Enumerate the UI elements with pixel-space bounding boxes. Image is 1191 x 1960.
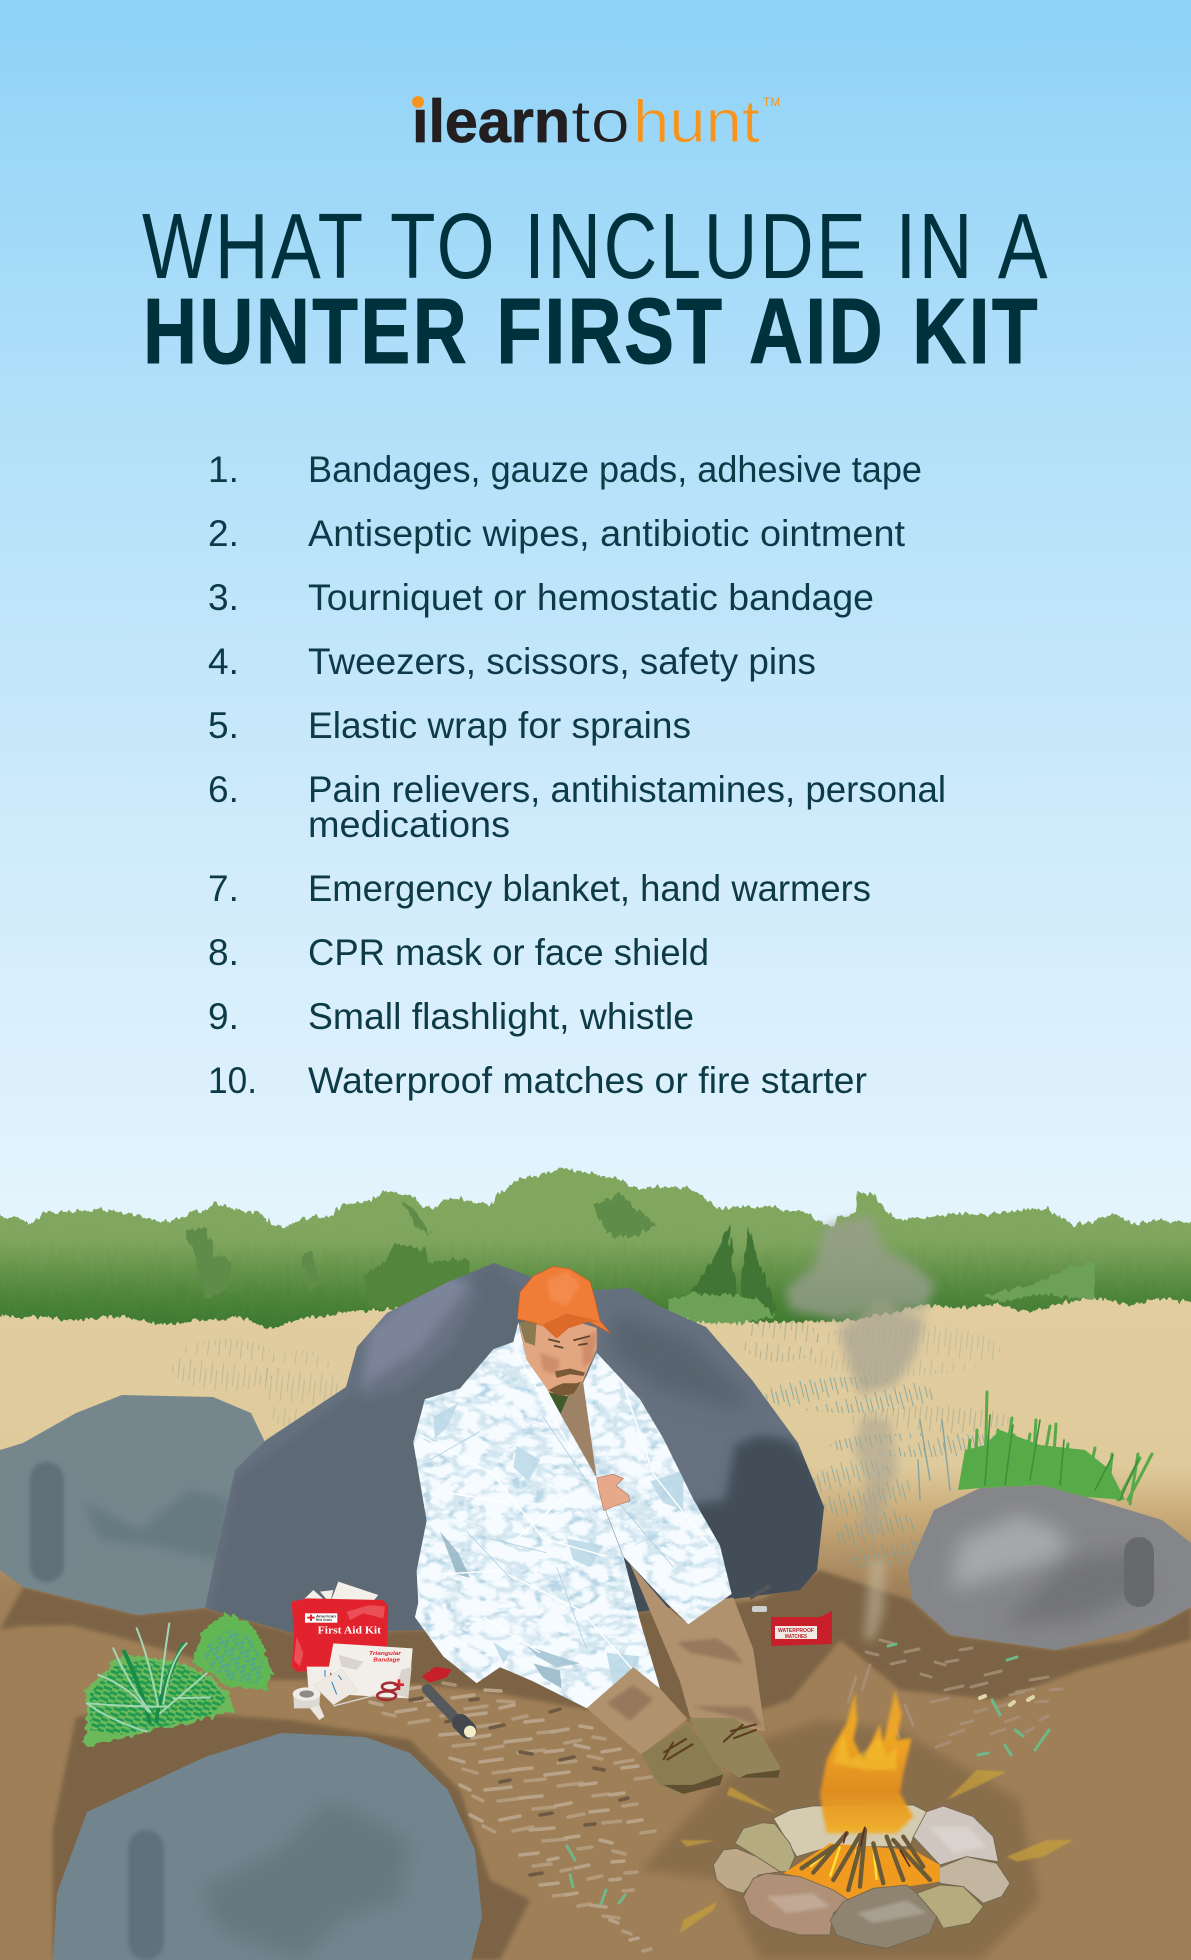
ground pebble texture	[370, 1640, 1062, 1951]
first aid kit and supplies: First Aid Kit	[318, 1624, 381, 1636]
ground shadows	[0, 1570, 1191, 1960]
numbered checklist: 1.	[208, 449, 239, 490]
left green bushes	[83, 1613, 272, 1747]
red first aid bag	[292, 1598, 388, 1672]
ring stones	[713, 1805, 1010, 1948]
small light bush	[193, 1613, 272, 1690]
numbered checklist: Tourniquet or hemostatic bandage	[308, 577, 874, 618]
sky background	[0, 0, 1191, 1260]
large dark boulder	[200, 1255, 830, 1645]
numbered checklist: Bandages, gauze pads, adhesive tape	[308, 449, 922, 490]
whistle	[422, 1667, 452, 1683]
shirt	[543, 1378, 600, 1489]
right leg	[630, 1564, 765, 1731]
hand	[597, 1474, 630, 1511]
numbered checklist	[208, 449, 946, 1101]
flashlight	[427, 1689, 476, 1738]
logo: ilearntohunt	[412, 88, 780, 155]
boots	[643, 1726, 722, 1792]
numbered checklist: 8.	[208, 932, 239, 973]
first aid kit and supplies: Red Cross	[316, 1618, 332, 1622]
waterproof matches box and fire starter: WATERPROOF	[778, 1628, 814, 1634]
papers in kit	[303, 1582, 378, 1605]
stone highlights	[767, 1827, 987, 1923]
first aid kit and supplies: Triangular	[369, 1651, 402, 1657]
numbered checklist: medications	[308, 804, 510, 845]
numbered checklist: 6.	[208, 769, 239, 810]
dark green bush	[83, 1623, 235, 1747]
logo: ilearntohunt: ılearn	[412, 88, 570, 155]
bandage pad	[328, 1643, 413, 1698]
waterproof matches box and fire starter: MATCHES	[785, 1634, 808, 1640]
bottom front boulder	[53, 1733, 482, 1960]
numbered checklist: 9.	[208, 996, 239, 1037]
left leg	[587, 1667, 687, 1755]
flames	[820, 1690, 913, 1833]
numbered checklist: Pain relievers, antihistamines, personal	[308, 769, 946, 810]
numbered checklist: Antiseptic wipes, antibiotic ointment	[308, 513, 906, 554]
numbered checklist: Tweezers, scissors, safety pins	[308, 641, 816, 682]
head	[519, 1317, 597, 1396]
numbered checklist: Waterproof matches or fire starter	[308, 1060, 867, 1101]
glowing embers and sticks	[810, 1847, 903, 1883]
right boulder	[908, 1485, 1191, 1650]
waterproof matches box and fire starter	[750, 1586, 832, 1646]
bag label	[305, 1613, 337, 1623]
logo: ilearntohunt: hunt	[633, 88, 760, 155]
numbered checklist: Elastic wrap for sprains	[308, 705, 691, 746]
first aid kit and supplies: Bandage	[373, 1657, 400, 1663]
logo: ilearntohunt: TM	[763, 95, 780, 109]
numbered checklist: 10.	[208, 1060, 257, 1101]
numbered checklist: 7.	[208, 868, 239, 909]
numbered checklist: CPR mask or face shield	[308, 932, 709, 973]
numbered checklist: 5.	[208, 705, 239, 746]
blanket front edge	[597, 1478, 623, 1556]
field and ground	[0, 1290, 1191, 1960]
numbered checklist: 3.	[208, 577, 239, 618]
orange cap	[517, 1266, 611, 1338]
emergency blanket	[410, 1321, 737, 1714]
numbered checklist: Emergency blanket, hand warmers	[308, 868, 871, 909]
numbered checklist: 4.	[208, 641, 239, 682]
numbered checklist: Small flashlight, whistle	[308, 996, 694, 1037]
heat flashes	[680, 1770, 1073, 1933]
campfire	[680, 1690, 1073, 1948]
logo: ilearntohunt: to	[571, 88, 630, 155]
first aid kit and supplies	[292, 1582, 476, 1738]
right grass bush	[918, 1392, 1152, 1504]
treeline	[0, 1168, 1191, 1330]
numbered checklist: 2.	[208, 513, 239, 554]
title	[142, 194, 1050, 383]
first aid kit and supplies: American	[316, 1614, 336, 1618]
left boulder	[0, 1395, 290, 1615]
campfire smoke	[785, 1215, 935, 1640]
hunter wrapped in emergency blanket	[410, 1266, 780, 1794]
